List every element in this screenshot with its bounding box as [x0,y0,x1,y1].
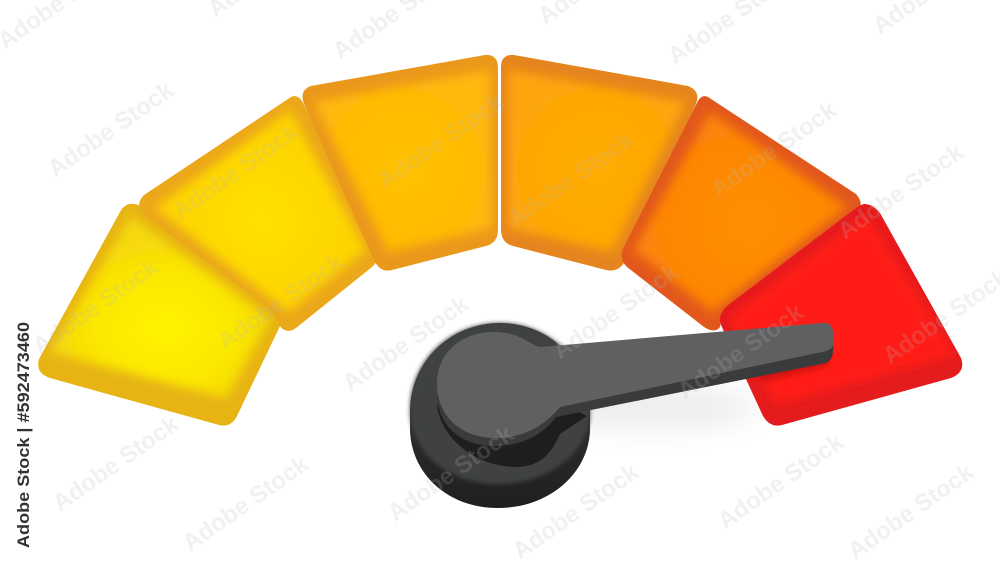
recess under hub [437,400,587,467]
watermark: Adobe Stock [48,410,184,517]
segment 2: yellow-amber [139,96,376,331]
watermark: Adobe Stock [706,96,842,203]
segment 4: orange-amber [500,50,705,275]
ground shadow under needle [540,386,760,430]
watermark: Adobe Stock [213,248,349,355]
segment 6: red, highest level [720,204,962,426]
watermark: Adobe Stock [168,118,304,225]
segment 3: amber [295,50,500,275]
watermark: Adobe Stock [508,458,644,563]
watermark: Adobe Stock [548,258,684,365]
segment 1: yellow [38,204,280,426]
watermark: Adobe Stock [338,290,474,397]
watermark: Adobe Stock [43,76,179,183]
dial knob [410,323,590,508]
needle thickness [437,345,833,446]
watermark: Adobe Stock [383,420,519,527]
needle shadow on red segment [745,352,832,381]
watermark: Adobe Stock [843,458,979,563]
watermark: Adobe Stock [178,450,314,557]
needle top face [437,323,833,438]
watermark: Adobe Stock [713,428,849,535]
knob base [410,323,590,508]
needle pointer [437,323,833,446]
watermark: Adobe Stock [503,126,639,233]
watermark: Adobe Stock [28,253,164,360]
segment 5: orange [622,96,861,330]
watermark: Adobe Stock [673,298,809,405]
watermark: Adobe Stock [373,88,509,195]
stock id text: Adobe Stock | #592473460 [15,322,33,548]
watermark: Adobe Stock [833,138,969,245]
